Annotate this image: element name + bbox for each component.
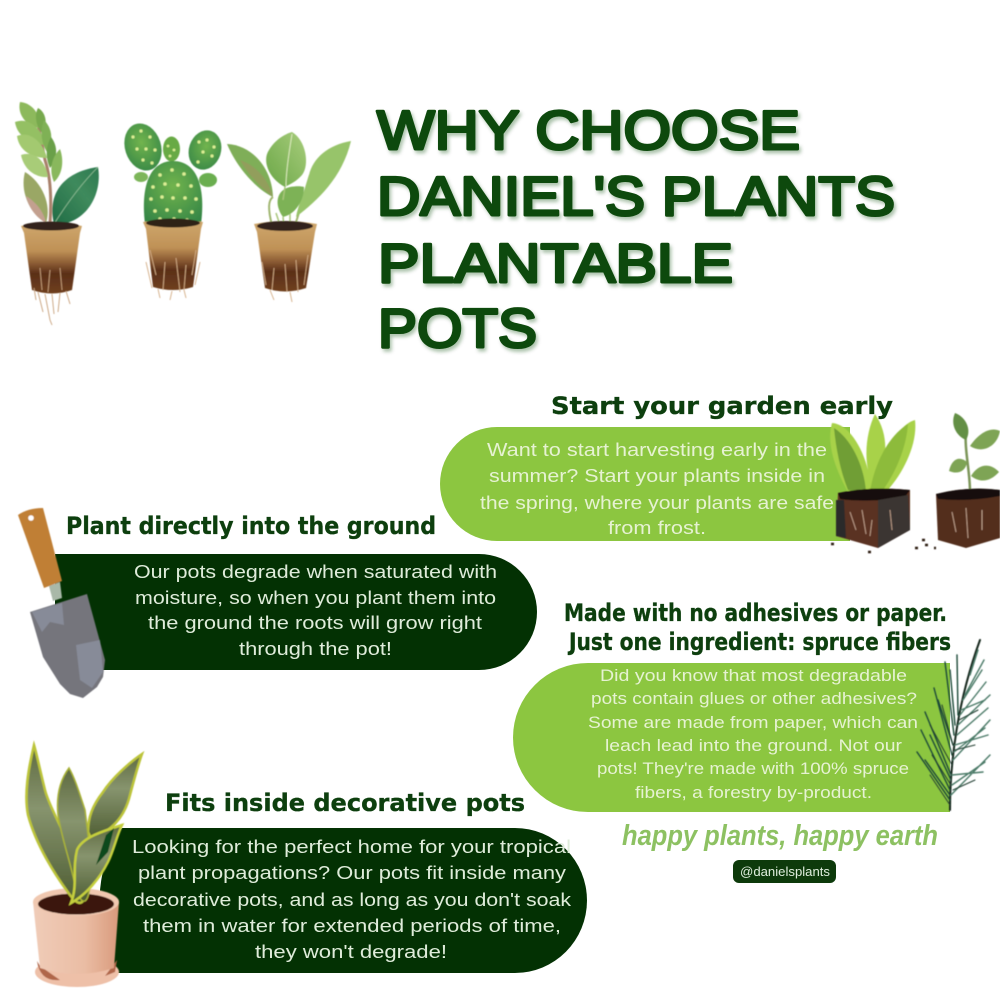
text block: pots contain glues or other adhesives? [591,690,917,708]
text block: decorative pots, and as long as you don't soak [133,889,572,910]
panel: made with no adhesives or paper [513,599,990,812]
heading [564,599,951,656]
text block: through the pot! [239,638,392,659]
handle badge [733,860,836,883]
text block: they won't degrade! [255,941,447,962]
text block: Want to start harvesting early in the [487,439,827,460]
text block [588,667,918,802]
panel background [100,828,587,973]
icon: cactus in pot [118,119,226,300]
heading: Plant directly into the ground [66,512,436,540]
icon: garden trowel [18,508,105,698]
title: DANIEL'S PLANTS [377,165,895,227]
text block: Our pots degrade when saturated with [134,561,497,582]
text block: Some are made from paper, which can [588,714,918,732]
panel background [440,427,850,541]
icon: leafy plant in pot [227,132,351,302]
text block [132,836,572,962]
title: PLANTABLE [378,232,733,294]
title: WHY CHOOSE [377,99,800,161]
text block: from frost. [608,517,706,538]
title: POTS [378,297,537,359]
illustration: three potted plants [15,102,351,325]
heading: Start your garden early [551,392,893,420]
panel background [513,663,950,812]
icon: lettuce seedling in soil block [830,414,925,552]
text block: Did you know that most degradable [600,667,907,685]
icon: zz plant in pot [15,102,99,325]
text block: the spring, where your plants are safe [480,492,834,513]
tagline: happy plants, happy earth [622,820,938,852]
text block: plant propagations? Our pots fit inside many [138,862,567,883]
icon: sprout in soil block [925,413,1000,548]
text block [480,439,834,538]
panel background [55,554,537,670]
title [377,99,895,359]
text block: them in water for extended periods of time, [143,915,561,936]
text block: moisture, so when you plant them into [135,587,496,608]
text block: leach lead into the ground. Not our [605,737,903,755]
text block [134,561,497,659]
panel: start your garden early [440,392,1000,552]
text block: fibers, a forestry by-product. [635,784,872,802]
panel: fits inside decorative pots [26,745,587,987]
icon: snake plant in terracotta pot [26,745,142,987]
text block: pots! They're made with 100% spruce [597,760,909,778]
heading: Fits inside decorative pots [165,789,525,817]
text block: the ground the roots will grow right [148,612,482,633]
panel: plant directly into the ground [18,508,537,698]
text block: summer? Start your plants inside in [489,465,825,486]
icon: spruce sprig [917,640,990,810]
handle badge: @danielsplants [740,865,830,879]
text block: Looking for the perfect home for your tropical [132,836,571,857]
